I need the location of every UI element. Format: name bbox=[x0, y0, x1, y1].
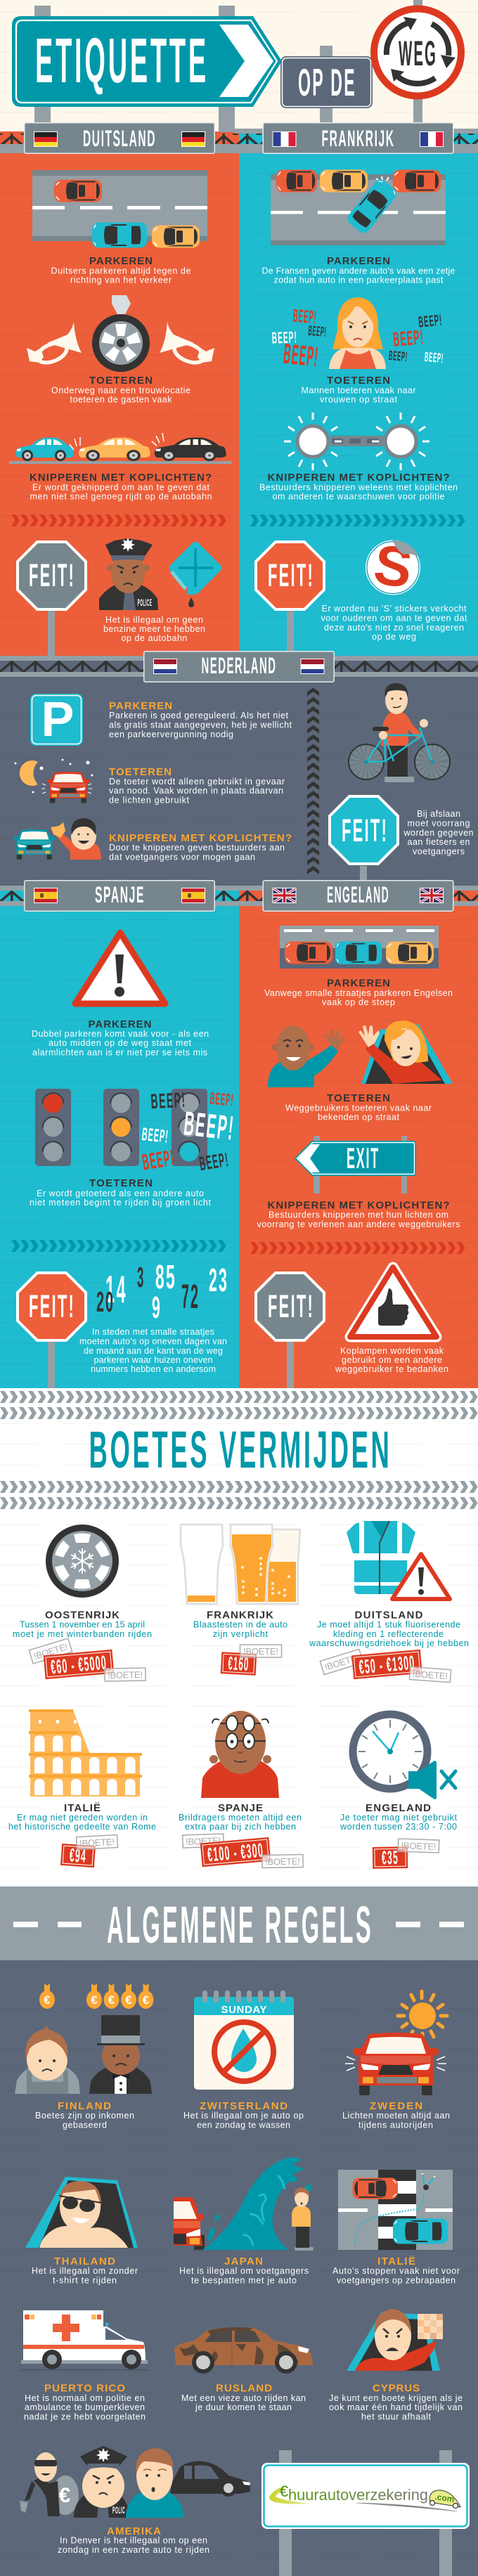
fine: Frankrijk text bbox=[193, 1610, 288, 1639]
fine: Frankrijk text: zijn verplicht bbox=[213, 1629, 269, 1639]
fact sign: Spain: FEIT! bbox=[29, 1288, 75, 1324]
stamps: Frankrijk fine: !BOETE! bbox=[243, 1646, 278, 1657]
rule: Thailand text: Het is illegaal om zonder bbox=[32, 2266, 138, 2276]
traffic lights with beeps: BEEP! bbox=[198, 1148, 231, 1174]
France honking text: TOETEREN bbox=[327, 375, 390, 387]
parking sign icon: P bbox=[41, 692, 74, 746]
background: Netherlands panel bbox=[0, 656, 478, 886]
money bags: € bbox=[125, 1993, 132, 2007]
fine: Duitsland text bbox=[309, 1610, 469, 1648]
rule: Zweden text bbox=[342, 2100, 450, 2130]
fine: Engeland text: Je toeter mag niet gebruikt bbox=[340, 1813, 458, 1823]
rule: Rusland text: RUSLAND bbox=[216, 2383, 272, 2394]
Spain fact text: nummers hebben en andersom bbox=[91, 1364, 216, 1374]
rule: Cyprus text: het stuur afhaalt bbox=[361, 2412, 432, 2422]
scattered house numbers: 20 bbox=[96, 1286, 115, 1318]
England parking illustration bbox=[280, 926, 439, 969]
rule: Finland text: gebaseerd bbox=[63, 2120, 107, 2130]
Spain parking text: Dubbel parkeren komt vaak voor - als een bbox=[32, 1029, 209, 1039]
England parking text bbox=[264, 977, 453, 1007]
rule: Cyprus text bbox=[329, 2383, 463, 2422]
warning triangle bbox=[75, 933, 165, 1004]
Spain honking text: TOETEREN bbox=[89, 1177, 153, 1189]
exit sign: EXIT bbox=[347, 1141, 380, 1174]
text: 23 bbox=[209, 1262, 228, 1298]
logo sign: € bbox=[280, 2483, 288, 2500]
Netherlands flashing text: dat voetgangers voor mogen gaan bbox=[109, 852, 255, 862]
stamps: Italië fine bbox=[60, 1834, 117, 1868]
rule: Japan text: Het is illegaal om voetgangers bbox=[179, 2266, 309, 2276]
Netherlands parking text: PARKEREN bbox=[109, 700, 172, 712]
rule: Zweden text: tijdens autorijden bbox=[358, 2120, 433, 2130]
wedding wheel with horns bbox=[27, 295, 214, 372]
France honking text: Mannen toeteren vaak naar bbox=[301, 385, 416, 395]
icon: colosseum bbox=[29, 1709, 142, 1797]
money bags: € bbox=[143, 1993, 150, 2007]
icon: clock with muted speaker bbox=[353, 1714, 456, 1799]
divider chevrons: Germany bbox=[11, 514, 227, 526]
stamps: Oostenrijk fine: €60 - €5000 bbox=[50, 1652, 108, 1678]
France fact text: Er worden nu 'S' stickers verkocht bbox=[322, 604, 467, 614]
France flashing text: om anderen te waarschuwen voor politie bbox=[273, 492, 445, 502]
fine: Oostenrijk text: Tussen 1 november en 15 april bbox=[20, 1619, 145, 1629]
Netherlands flashing text: Door te knipperen geven bestuurders aan bbox=[109, 843, 285, 853]
sign posts bbox=[34, 0, 422, 132]
fact sign: France bbox=[256, 542, 324, 656]
truss band: Netherlands bbox=[0, 656, 478, 677]
angry driver with censored gesture bbox=[347, 2309, 443, 2371]
title sign: etiquette arrow: ETIQUETTE bbox=[35, 26, 209, 96]
Germany parking text: richting van het verkeer bbox=[70, 276, 172, 285]
France flashing text: KNIPPEREN MET KOPLICHTEN? bbox=[267, 472, 450, 484]
stamps: Engeland fine: €35 bbox=[382, 1847, 399, 1868]
Spain fact text: moeten auto's op oneven dagen van bbox=[79, 1337, 227, 1347]
road sign: Engeland bbox=[263, 881, 453, 911]
rule: Finland text: FINLAND bbox=[58, 2100, 111, 2112]
England parking text: vaak op de stoep bbox=[322, 997, 395, 1007]
Spain honking text: Er wordt getoeterd als een andere auto bbox=[37, 1189, 204, 1198]
annoyed woman with beeps bbox=[271, 297, 444, 373]
truss band: top bbox=[0, 129, 478, 153]
England flashing text: voorrang te verlenen aan andere weggebruikers bbox=[257, 1219, 460, 1229]
fine: Oostenrijk text bbox=[13, 1610, 152, 1639]
Germany flashing text: KNIPPEREN MET KOPLICHTEN? bbox=[30, 472, 212, 484]
background: France panel bbox=[239, 134, 478, 656]
Netherlands parking text bbox=[109, 700, 292, 739]
ambulance bbox=[20, 2310, 150, 2370]
France honking text bbox=[301, 375, 416, 405]
Spain fact text: In steden met smalle straatjes bbox=[92, 1327, 214, 1337]
fact sign: Netherlands: FEIT! bbox=[342, 813, 388, 848]
background: white fines section bbox=[0, 1388, 478, 1886]
rule: Thailand text: THAILAND bbox=[54, 2255, 115, 2267]
stamps: Oostenrijk fine: !BOETE! bbox=[108, 1669, 143, 1681]
Netherlands fact text bbox=[403, 809, 474, 856]
divider chevrons: Spain bbox=[11, 1240, 227, 1252]
rule: Puerto Rico text: Het is normaal om politie en bbox=[25, 2393, 145, 2403]
annoyed woman with beeps: BEEP! bbox=[392, 326, 425, 351]
fact sign: France: FEIT! bbox=[268, 557, 314, 593]
dirty car bbox=[174, 2327, 313, 2374]
rule: Italië text: Auto's stoppen vaak niet voor bbox=[332, 2266, 460, 2276]
traffic lights with beeps: BEEP! bbox=[150, 1089, 186, 1113]
icon: man with two pairs of glasses bbox=[201, 1711, 279, 1798]
Spain honking text: niet meteen begint te rijden bij groen licht bbox=[30, 1198, 212, 1208]
background: general rules panel bbox=[0, 1960, 478, 2576]
Netherlands parking text: een parkeervergunning nodig bbox=[109, 730, 233, 739]
flashing headlights illustration bbox=[284, 413, 429, 470]
Germany parking text: Duitsers parkeren altijd tegen de bbox=[51, 266, 191, 276]
fine: Spanje text bbox=[179, 1802, 302, 1832]
fine: Italië text: ITALIË bbox=[64, 1802, 101, 1814]
France flashing text: Bestuurders knipperen weleens met koplichten bbox=[259, 482, 458, 492]
stamps: Engeland fine bbox=[373, 1839, 439, 1869]
road sign: Nederland: NEDERLAND bbox=[201, 653, 277, 678]
stamps: Oostenrijk fine bbox=[29, 1638, 146, 1681]
empty fuel can bbox=[167, 540, 224, 607]
fine: Duitsland text: kleding en 1 reflecterende bbox=[333, 1629, 444, 1639]
Spain parking text: alarmlichten aan is er niet per se iets mis bbox=[32, 1047, 207, 1057]
money bags: € bbox=[91, 1993, 98, 2007]
Netherlands fact text: aan fietsers en bbox=[408, 837, 470, 847]
cyclist with bicycle bbox=[349, 683, 450, 782]
teal car with waving man bbox=[14, 818, 101, 860]
road sign: Engeland: ENGELAND bbox=[327, 882, 389, 907]
rule: Thailand text: t-shirt te rijden bbox=[53, 2276, 117, 2286]
car splashing pedestrian with wave bbox=[174, 2157, 314, 2251]
annoyed woman with beeps: BEEP! bbox=[308, 323, 327, 340]
title sign: op de: OP DE bbox=[298, 60, 356, 104]
rule: Rusland text: Met een vieze auto rijden kan bbox=[181, 2393, 306, 2403]
England honking text: TOETEREN bbox=[327, 1092, 390, 1104]
fact sign: England: FEIT! bbox=[268, 1288, 314, 1324]
France parking text: PARKEREN bbox=[327, 255, 390, 267]
Netherlands parking text: als gratis staat aangegeven, heb je wellicht bbox=[109, 720, 292, 730]
France parking illustration bbox=[271, 170, 446, 245]
rule: Zweden text: Lichten moeten altijd aan bbox=[342, 2111, 450, 2121]
England honking text bbox=[285, 1092, 432, 1122]
fact sign: Germany: FEIT! bbox=[29, 557, 75, 593]
divider chevrons: France bbox=[250, 514, 466, 526]
England parking text: Vanwege smalle straatjes parkeren Engelsen bbox=[264, 988, 453, 998]
fine: Duitsland text: DUITSLAND bbox=[354, 1610, 423, 1621]
Spain parking text bbox=[32, 1018, 209, 1057]
text: POLICE bbox=[138, 597, 152, 608]
Netherlands honking text: TOETEREN bbox=[109, 766, 172, 778]
France parking text: De Fransen geven andere auto's vaak een zetje bbox=[261, 266, 456, 276]
rule: Finland text bbox=[35, 2100, 134, 2130]
rule: Zweden text: ZWEDEN bbox=[370, 2100, 422, 2112]
fine: Duitsland text: Je moet altijd 1 stuk fluoriserende bbox=[317, 1619, 460, 1629]
France parking text bbox=[261, 255, 456, 285]
scattered house numbers: 14 bbox=[105, 1267, 127, 1311]
Germany honking text bbox=[51, 375, 190, 405]
annoyed woman with beeps: BEEP! bbox=[282, 339, 321, 373]
Spain fact text: parkeren waar huizen oneven bbox=[94, 1355, 213, 1365]
background: England panel bbox=[239, 891, 478, 1388]
S sticker: S bbox=[370, 533, 416, 600]
rule: Zwitserland text: ZWITSERLAND bbox=[200, 2100, 288, 2112]
fine: Italië text: het historische gedeelte van Rome bbox=[8, 1822, 156, 1832]
text: BEEP! bbox=[424, 350, 444, 366]
stamps: Duitsland fine: !BOETE! bbox=[323, 1652, 360, 1672]
rule: Italië text: voetgangers op zebrapaden bbox=[337, 2276, 456, 2286]
Netherlands fact text: worden gegeven bbox=[403, 828, 474, 838]
France fact text: voor ouderen om aan te geven dat bbox=[321, 613, 467, 623]
rule: Zwitserland text: een zondag te wassen bbox=[197, 2120, 290, 2130]
annoyed woman with beeps: BEEP! bbox=[292, 305, 318, 328]
stamps: Spanje fine: !BOETE! bbox=[265, 1856, 300, 1867]
Germany fact text: benzine meer te hebben bbox=[103, 624, 205, 634]
chevron bands below fines title bbox=[0, 1481, 478, 1509]
sunday calendar with no-washing sign: SUNDAY bbox=[221, 2004, 267, 2016]
scattered house numbers: 72 bbox=[181, 1279, 200, 1316]
Netherlands honking text: De toeter wordt alleen gebruikt in gevaar bbox=[109, 777, 285, 787]
Germany parking text bbox=[51, 255, 191, 285]
fine: Frankrijk text: Blaastesten in de auto bbox=[193, 1619, 288, 1629]
fact sign: Spain bbox=[18, 1273, 86, 1388]
rule: Rusland text bbox=[181, 2383, 306, 2412]
fine: Engeland text: ENGELAND bbox=[366, 1802, 431, 1814]
road sign: Spanje: SPANJE bbox=[95, 882, 145, 907]
rule: Japan text: te bespatten met je auto bbox=[191, 2276, 297, 2286]
England flashing text bbox=[257, 1199, 460, 1229]
France flashing text bbox=[259, 472, 458, 502]
Netherlands fact text: moet voorrang bbox=[408, 818, 470, 828]
logo sign bbox=[261, 2450, 470, 2576]
stamps: Italië fine: €94 bbox=[69, 1844, 87, 1867]
background: Spain panel bbox=[0, 891, 239, 1388]
England flashing text: KNIPPEREN MET KOPLICHTEN? bbox=[267, 1199, 450, 1212]
scattered house numbers: 3 bbox=[137, 1261, 145, 1293]
annoyed woman with beeps: BEEP! bbox=[271, 328, 297, 347]
rule: Japan text: JAPAN bbox=[224, 2255, 263, 2267]
road sign: Duitsland bbox=[25, 123, 214, 153]
background: cream header bbox=[0, 0, 478, 134]
general rules header band bbox=[0, 1886, 478, 1960]
England fact text: Koplampen worden vaak bbox=[340, 1346, 444, 1356]
traffic lights with beeps: BEEP! bbox=[141, 1123, 169, 1147]
icon: beer glasses bbox=[181, 1525, 300, 1604]
scattered house numbers bbox=[96, 1259, 228, 1325]
Spain honking text bbox=[30, 1177, 212, 1208]
header: title signs bbox=[12, 0, 461, 132]
road sign: Frankrijk: FRANKRIJK bbox=[322, 126, 395, 151]
road sign: Frankrijk bbox=[263, 123, 453, 153]
stamps: Duitsland fine bbox=[320, 1649, 451, 1683]
stamps: Spanje fine: €100 - €300 bbox=[207, 1839, 264, 1865]
logo sign: huurautoverzekering bbox=[288, 2486, 428, 2504]
fine: Engeland text bbox=[340, 1802, 458, 1832]
divider chevrons: England bbox=[250, 1242, 466, 1254]
Netherlands flashing text: KNIPPEREN MET KOPLICHTEN? bbox=[109, 832, 292, 844]
Netherlands honking text bbox=[109, 766, 285, 805]
rule: Japan text bbox=[179, 2255, 309, 2286]
Germany flashing text: men niet snel genoeg rijdt op de autobahn bbox=[30, 492, 212, 502]
Germany flashing text: Er wordt geknipperd om aan te geven dat bbox=[32, 482, 210, 492]
rule: Amerika text: In Denver is het illegaal om op een bbox=[60, 2536, 207, 2546]
money bags: € bbox=[108, 1993, 115, 2007]
fine: Spanje text: SPANJE bbox=[218, 1802, 263, 1814]
Netherlands honking text: de lichten gebruikt bbox=[109, 796, 190, 805]
Germany honking text: Onderweg naar een trouwlocatie bbox=[51, 385, 190, 395]
fine: Frankrijk text: FRANKRIJK bbox=[207, 1610, 273, 1621]
sun and red car bbox=[345, 1991, 447, 2095]
thief, police officer and driver with black car: POLIC bbox=[112, 2504, 125, 2516]
thief, police officer and driver with black car: € bbox=[59, 2484, 71, 2507]
money bags bbox=[39, 1983, 153, 2009]
rule: Italië text bbox=[332, 2255, 460, 2286]
title sign: etiquette arrow bbox=[12, 16, 282, 107]
rule: Italië text: ITALIË bbox=[377, 2255, 415, 2267]
annoyed woman with beeps: BEEP! bbox=[388, 349, 408, 365]
Germany parking illustration bbox=[32, 170, 207, 247]
fact sign: Netherlands bbox=[330, 796, 398, 883]
fine: Duitsland text: waarschuwingsdriehoek bij je hebben bbox=[309, 1638, 469, 1648]
Germany flashing text bbox=[30, 472, 212, 502]
rule: Puerto Rico text: PUERTO RICO bbox=[44, 2383, 125, 2394]
stamps: Duitsland fine: !BOETE! bbox=[413, 1669, 448, 1681]
rule: Cyprus text: CYPRUS bbox=[373, 2383, 420, 2394]
Netherlands parking text: Parkeren is goed gereguleerd. Als het niet bbox=[109, 711, 289, 720]
rule: Puerto Rico text bbox=[24, 2383, 146, 2422]
rule: Cyprus text: ook maar één hand tijdelijk van bbox=[329, 2402, 463, 2412]
fine: Italië text bbox=[8, 1802, 156, 1832]
fine: Oostenrijk text: OOSTENRIJK bbox=[45, 1610, 119, 1621]
exit sign bbox=[295, 1136, 416, 1193]
Germany fact text: Het is illegaal om geen bbox=[105, 615, 203, 625]
chevron bands above fines title bbox=[0, 1391, 478, 1419]
France fact text bbox=[321, 604, 467, 642]
parking sign icon bbox=[30, 692, 83, 746]
fine: Oostenrijk text: moet je met winterbanden rijden bbox=[13, 1629, 152, 1639]
Spain parking text: auto midden op de weg staat met bbox=[49, 1038, 192, 1048]
rule: Zwitserland text: Het is illegaal om je auto op bbox=[183, 2111, 304, 2121]
England honking text: Weggebruikers toeteren vaak naar bbox=[285, 1103, 432, 1113]
rule: Thailand text bbox=[32, 2255, 138, 2286]
stamps: Oostenrijk fine: !BOETE! bbox=[32, 1641, 69, 1662]
Netherlands flashing text bbox=[109, 832, 292, 862]
England honking text: bekenden op straat bbox=[318, 1112, 400, 1122]
fact sign: Germany bbox=[18, 542, 86, 656]
background: Germany panel bbox=[0, 131, 239, 656]
fine: Spanje text: extra paar bij zich hebben bbox=[185, 1822, 296, 1832]
England flashing text: Bestuurders knipperen met hun lichten om bbox=[269, 1210, 448, 1220]
money bags: € bbox=[44, 1993, 51, 2007]
Netherlands honking text: van nood. Vaak worden in plaats daarvan bbox=[109, 786, 283, 796]
Germany fact text bbox=[103, 615, 205, 643]
icon: safety vest and warning triangle bbox=[347, 1521, 450, 1599]
scattered house numbers: 9 bbox=[152, 1290, 162, 1325]
thumbs-up triangle bbox=[350, 1267, 437, 1337]
Netherlands fact text: Bij afslaan bbox=[417, 809, 460, 819]
poor and rich man bbox=[15, 2015, 152, 2094]
Spain fact text: de maand aan de kant van de weg bbox=[84, 1346, 223, 1356]
Spain parking text: PARKEREN bbox=[89, 1018, 152, 1030]
scattered house numbers: 85 bbox=[155, 1259, 176, 1296]
France fact text: deze auto's niet zo snel reageren bbox=[324, 623, 464, 633]
traffic lights with beeps bbox=[35, 1089, 236, 1175]
traffic lights with beeps: BEEP! bbox=[141, 1145, 176, 1175]
Germany honking text: TOETEREN bbox=[89, 375, 153, 387]
road sign: Duitsland: DUITSLAND bbox=[83, 126, 156, 151]
France parking text: zodat hun auto in een parkeerplaats past bbox=[274, 276, 444, 285]
waving people illustration bbox=[268, 1021, 453, 1087]
stamps: Frankrijk fine: €160 bbox=[228, 1652, 250, 1675]
rule: Puerto Rico text: nadat je ze hebt voorgelaten bbox=[24, 2412, 146, 2422]
rule: Zwitserland text bbox=[183, 2100, 304, 2130]
police officer bbox=[99, 538, 158, 610]
stamps: Frankrijk fine bbox=[221, 1645, 281, 1676]
rule: Cyprus text: Je kunt een boete krijgen als je bbox=[329, 2393, 463, 2403]
Netherlands fact text: voetgangers bbox=[413, 846, 465, 856]
text: BEEP! bbox=[182, 1105, 236, 1148]
tailgating cars illustration bbox=[9, 433, 232, 464]
fine: Italië text: Er mag niet gereden worden in bbox=[17, 1813, 148, 1823]
road sign: Nederland bbox=[144, 652, 334, 682]
rule: Rusland text: je duur komen te staan bbox=[195, 2402, 292, 2412]
road sign: Spanje bbox=[25, 881, 214, 911]
England fact text: gebruikt om een andere bbox=[342, 1355, 442, 1365]
Germany fact text: op de autobahn bbox=[121, 633, 188, 643]
stamps: Italië fine: !BOETE! bbox=[79, 1837, 115, 1849]
fine: Engeland text: worden tussen 23:30 - 7:00 bbox=[340, 1822, 457, 1832]
zebra crossing illustration bbox=[338, 2170, 453, 2250]
text: BEEP! bbox=[209, 1089, 235, 1110]
rule: Amerika text bbox=[58, 2525, 209, 2555]
shirtless driver in shades bbox=[25, 2177, 138, 2248]
rule: Amerika text: zondag in een zwarte auto te rijden bbox=[58, 2545, 209, 2555]
France fact text: op de weg bbox=[372, 632, 416, 642]
night car with moon and stars bbox=[14, 759, 93, 803]
Germany parking text: PARKEREN bbox=[89, 255, 153, 267]
logo sign: .com bbox=[434, 2492, 455, 2504]
title sign: roundabout weg bbox=[374, 8, 461, 96]
Germany honking text: toeteren de gasten vaak bbox=[70, 395, 172, 405]
rule: Amerika text: AMERIKA bbox=[107, 2525, 161, 2537]
text: BEEP! bbox=[418, 311, 443, 331]
rule: Puerto Rico text: ambulance te bumperkleven bbox=[25, 2402, 145, 2412]
fact sign: England bbox=[256, 1273, 324, 1388]
truss band: Spain and England bbox=[0, 886, 478, 906]
stamps: Engeland fine: !BOETE! bbox=[401, 1840, 437, 1852]
Spain fact text bbox=[79, 1327, 227, 1374]
stamps: Spanje fine bbox=[183, 1834, 303, 1868]
rule: Finland text: Boetes zijn op inkomen bbox=[35, 2111, 134, 2121]
title sign: op de bbox=[280, 56, 373, 108]
stamps: Spanje fine: !BOETE! bbox=[186, 1835, 221, 1847]
England parking text: PARKEREN bbox=[327, 977, 390, 990]
France honking text: vrouwen op straat bbox=[320, 395, 398, 405]
sunday calendar with no-washing sign bbox=[194, 1991, 294, 2090]
England fact text: weggebruiker te bedanken bbox=[335, 1364, 448, 1374]
thief, police officer and driver with black car bbox=[20, 2446, 250, 2518]
fine: Spanje text: Brildragers moeten altijd een bbox=[179, 1813, 302, 1823]
England fact text bbox=[335, 1346, 448, 1374]
icon: winter tyre bbox=[46, 1525, 119, 1598]
tyre track divider bbox=[307, 687, 319, 874]
